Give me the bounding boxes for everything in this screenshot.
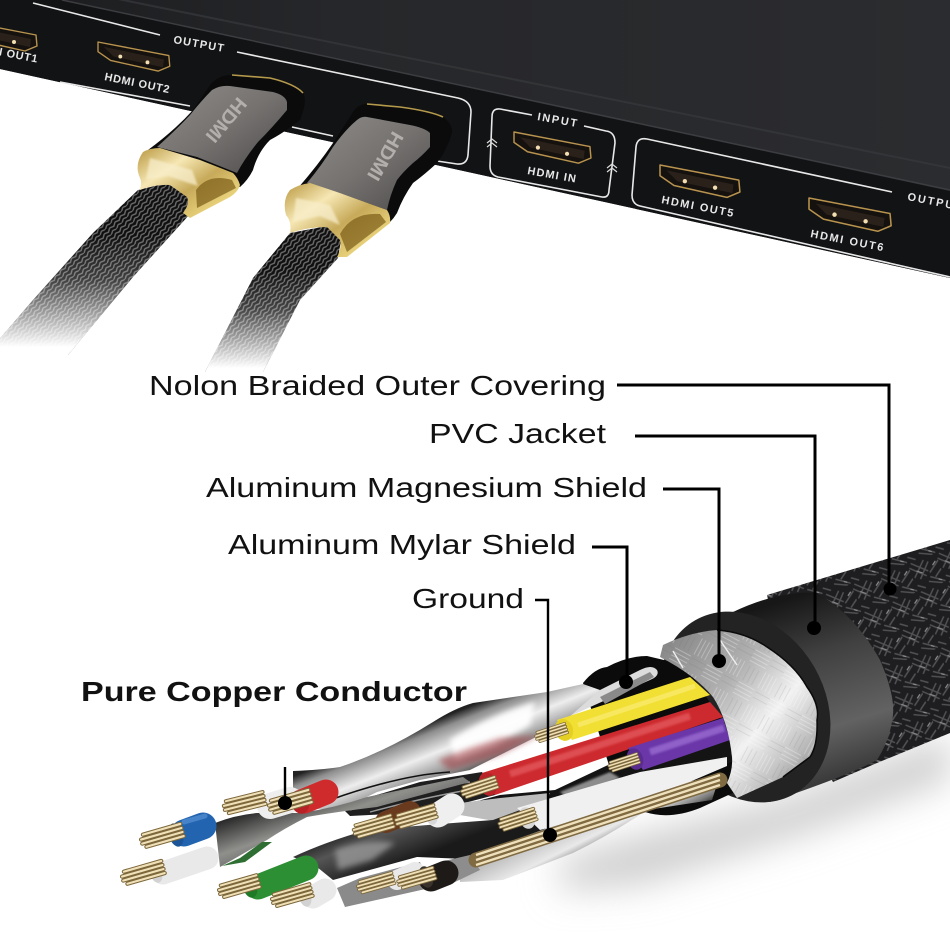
- heading labels: [81, 370, 647, 707]
- jacket inner rim: [717, 630, 818, 777]
- label: PVC Jacket: PVC Jacket: [429, 418, 606, 449]
- braided outer covering: [767, 540, 950, 782]
- device labels: HDMI OUT2: [103, 71, 170, 96]
- port: HDMI OUT1: [0, 21, 37, 51]
- wire: black: [397, 864, 446, 890]
- right HDMI cable and connector: [205, 104, 452, 372]
- port: HDMI OUT6: [809, 198, 891, 231]
- grey plate: [307, 117, 430, 210]
- device labels: [0, 34, 950, 254]
- HDMI logo: HDMI: [201, 93, 250, 146]
- leader line: ground: [535, 600, 557, 842]
- ground copper strand: [476, 775, 720, 865]
- braided cable: [205, 226, 341, 372]
- input frame: [490, 109, 615, 197]
- device labels: OUTPUT: [172, 34, 225, 55]
- cable shadow: [560, 735, 950, 890]
- wire: short red with tip: [268, 788, 326, 816]
- PVC jacket cylinder: [720, 593, 893, 802]
- panel: HDMI splitter device: [0, 0, 950, 278]
- leader line: magnesium shield: [663, 489, 726, 668]
- left HDMI cable and connector: [0, 75, 305, 355]
- foil strip inside hollow: [557, 667, 658, 722]
- output frame right: [632, 139, 950, 277]
- label: Pure Copper Conductor: Pure Copper Conductor: [81, 676, 467, 707]
- device labels: HDMI OUT5: [660, 194, 734, 220]
- gold collar: [285, 183, 390, 257]
- output frame left: [33, 3, 471, 164]
- device front face: [0, 0, 950, 278]
- foil tube around red pair: [293, 684, 600, 810]
- wire: blue: [140, 816, 205, 849]
- wire: white lower left: [121, 858, 207, 885]
- device labels: HDMI IN: [526, 165, 577, 185]
- port: HDMI OUT2: [98, 42, 170, 71]
- connector shell: [148, 75, 305, 187]
- HDMI logo: HDMI: [362, 128, 407, 184]
- braided cable: [0, 183, 192, 355]
- wire: white under green: [271, 884, 325, 908]
- foil around blue pair: [215, 777, 470, 867]
- device top face: [0, 0, 950, 278]
- grey plate: [157, 86, 287, 173]
- arrows beside input: [487, 139, 617, 172]
- wire: yellow: [535, 677, 710, 743]
- foil around ground: [458, 775, 720, 882]
- wire: white behind short red: [270, 800, 290, 806]
- silver Mylar shield crescent: [660, 630, 818, 798]
- wire: white centre short: [395, 804, 452, 828]
- foil strands centre: [340, 772, 495, 816]
- PVC jacket front ring: [626, 580, 864, 834]
- wire: brown: [353, 812, 410, 837]
- leader line: Mylar shield: [592, 547, 633, 689]
- wire: green: [218, 868, 306, 900]
- foil tube grey-dark lower: [293, 800, 547, 880]
- cutaway cable illustration: [121, 540, 950, 908]
- wire: long red: [461, 702, 723, 798]
- cable interior hollow: [583, 656, 735, 815]
- device labels: INPUT: [536, 111, 578, 130]
- leader line: outer covering: [617, 385, 896, 596]
- shield weave texture: [660, 630, 818, 798]
- leader line: copper conductor: [278, 767, 292, 810]
- copper tip behind red: [223, 792, 265, 814]
- wire: white rear short: [357, 872, 415, 893]
- wire: purple: [608, 718, 730, 772]
- port: HDMI IN: [514, 132, 591, 163]
- gold collar: [138, 148, 240, 218]
- label: Aluminum Magnesium Shield: Aluminum Magnesium Shield: [206, 472, 647, 503]
- device labels: HDMI OUT6: [809, 228, 884, 254]
- wire: white centre: [498, 757, 727, 831]
- leader line: PVC jacket: [635, 436, 821, 635]
- label: Aluminum Mylar Shield: Aluminum Mylar Shield: [228, 529, 576, 560]
- label: Nolon Braided Outer Covering: Nolon Braided Outer Covering: [149, 370, 606, 401]
- port: HDMI OUT5: [660, 165, 740, 197]
- silver band to white wire: [460, 793, 550, 822]
- label: Ground: Ground: [412, 583, 524, 614]
- connector shell: [298, 104, 452, 222]
